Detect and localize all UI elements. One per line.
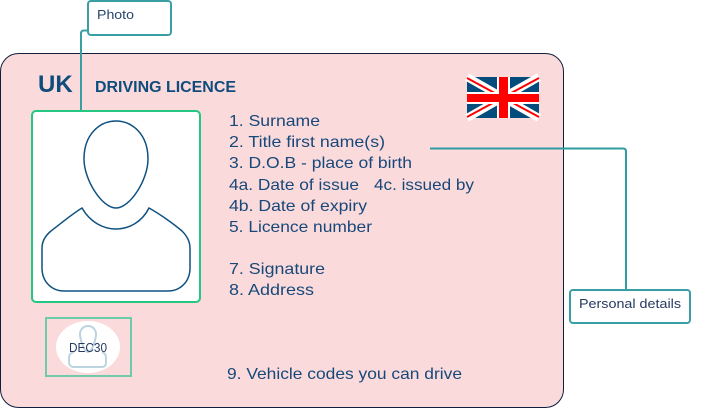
personal details list: 1. Surname — [229, 113, 320, 130]
callout: personal details: Personal details — [579, 296, 682, 311]
personal details list: 5. Licence number — [229, 219, 373, 236]
heading: driving licence: DRIVING LICENCE — [95, 79, 236, 96]
personal details list: 4b. Date of expiry — [229, 198, 367, 215]
ghost photo stamp: DEC30 — [69, 341, 107, 355]
vehicle codes text: 9. Vehicle codes you can drive — [227, 366, 462, 383]
personal details list: 4a. Date of issue — [229, 177, 359, 194]
icon: union jack flag — [467, 77, 539, 118]
ghost photo stamp — [46, 318, 131, 376]
personal details list: 8. Address — [229, 282, 314, 299]
heading: UK: UK — [38, 71, 73, 98]
personal details list: 2. Title first name(s) — [229, 134, 385, 151]
callout: photo — [88, 1, 171, 35]
personal details list: 3. D.O.B - place of birth — [229, 155, 412, 172]
connector: photo — [81, 30, 88, 111]
personal details list: 4c. issued by — [374, 177, 474, 194]
personal details list — [229, 113, 474, 299]
icon: head — [84, 121, 148, 208]
licence card — [0, 54, 564, 408]
personal details list: 7. Signature — [229, 261, 325, 278]
icon: shoulders — [42, 208, 190, 291]
photo frame — [32, 111, 200, 302]
icon: small ghost person — [69, 326, 106, 367]
callout: photo: Photo — [97, 7, 134, 22]
connector: personal details — [430, 148, 626, 291]
callout: personal details — [570, 290, 690, 323]
